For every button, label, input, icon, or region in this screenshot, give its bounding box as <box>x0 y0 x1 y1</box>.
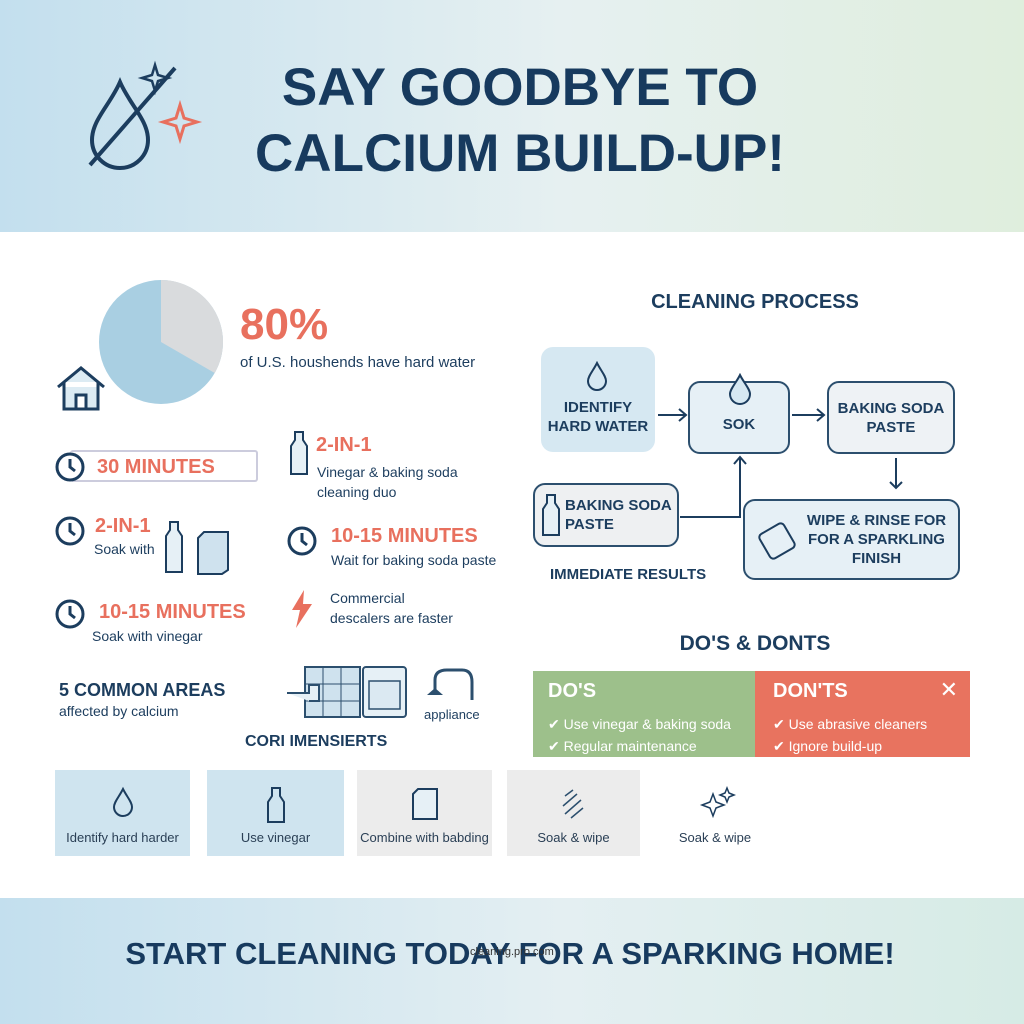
card: vinegar: Use vinegar <box>241 830 310 845</box>
step: identify hard water: IDENTIFY <box>564 398 632 416</box>
header band <box>0 0 1024 232</box>
card: combine <box>357 770 492 856</box>
step: baking soda paste 2: BAKING SODA <box>565 497 672 514</box>
title <box>255 58 785 183</box>
label: immediate results: IMMEDIATE RESULTS <box>550 566 706 583</box>
card: soak & wipe sparkles <box>679 786 751 845</box>
stat: 2-in-1 duo <box>290 431 458 500</box>
stat: 2-in-1 duo: 2-IN-1 <box>316 434 372 456</box>
stat: 10-15 wait: Wait for baking soda paste <box>331 552 496 568</box>
card: identify: Identify hard harder <box>66 830 179 845</box>
title: CALCIUM BUILD-UP! <box>255 124 785 183</box>
stat: 30 minutes <box>56 450 258 482</box>
footer call to action: START CLEANING TODAY FOR A SPARKING HOME! <box>125 936 895 971</box>
flowchart <box>533 347 960 583</box>
heading: cleaning process: CLEANING PROCESS <box>651 291 859 313</box>
icons: faucet tiles, oven, shower <box>287 666 474 718</box>
step: identify hard water <box>541 347 655 452</box>
panel: donts <box>755 671 970 757</box>
step: baking soda paste 2 <box>533 483 679 547</box>
arrows <box>658 408 903 518</box>
panel: donts: ✔ Ignore build-up <box>773 738 882 754</box>
step: sok <box>688 381 790 454</box>
title: SAY GOODBYE TO <box>282 58 758 117</box>
stat 80% <box>240 300 475 371</box>
stat: 10-15 minutes vinegar: 10-15 MINUTES <box>99 601 246 623</box>
panel: donts: DON'TS <box>773 680 848 702</box>
card: soak & wipe <box>507 770 640 856</box>
stat: 30 minutes: 30 MINUTES <box>97 456 215 478</box>
step: baking soda paste <box>827 381 955 454</box>
step: wipe & rinse: FOR A SPARKLING <box>808 531 945 548</box>
stat: 2-in-1 duo: Vinegar & baking soda <box>317 464 458 480</box>
stat: 2-in-1 soak <box>56 515 229 575</box>
stat: 10-15 wait <box>288 525 496 568</box>
stat: 10-15 wait: 10-15 MINUTES <box>331 525 478 547</box>
card: soak & wipe sparkles: Soak & wipe <box>679 830 751 845</box>
5 common areas: 5 COMMON AREAS <box>59 680 225 700</box>
card: identify <box>55 770 190 856</box>
step: wipe & rinse <box>743 499 960 580</box>
icon: house <box>57 366 105 410</box>
panel: donts: ✔ Use abrasive cleaners <box>773 716 927 732</box>
step: wipe & rinse: FINISH <box>852 550 901 567</box>
step: baking soda paste: BAKING SODA <box>838 400 944 416</box>
stat: commercial descalers <box>292 590 453 628</box>
stat: 2-in-1 soak: Soak with <box>94 541 155 557</box>
card: combine: Combine with babding <box>360 830 489 845</box>
pie chart <box>99 280 223 404</box>
stat: 2-in-1 duo: cleaning duo <box>317 484 396 500</box>
panel: do's <box>533 671 755 757</box>
heading: do's & donts: DO'S & DONTS <box>680 632 830 655</box>
stat: commercial descalers: descalers are faster <box>330 610 453 626</box>
icon: crossed water drop with sparkles <box>88 60 202 170</box>
card: vinegar <box>207 770 344 856</box>
text: appliance <box>424 707 480 722</box>
footer band: cleaning.pro.com <box>470 946 554 958</box>
5 common areas: affected by calcium <box>59 703 179 719</box>
panel: do's: DO'S <box>548 680 596 702</box>
card: soak & wipe: Soak & wipe <box>537 830 610 845</box>
stat: commercial descalers: Commercial <box>330 590 405 606</box>
stat 80%: of U.S. houshends have hard water <box>240 354 475 371</box>
stat 80%: 80% <box>240 300 328 349</box>
label: cori mensierts: CORI IMENSIERTS <box>245 733 387 750</box>
panel: donts: ✕ <box>940 677 958 702</box>
step: sok: SOK <box>723 416 755 433</box>
step: baking soda paste: PASTE <box>867 418 915 436</box>
step: wipe & rinse: WIPE & RINSE FOR <box>807 512 946 529</box>
footer band <box>0 898 1024 1024</box>
step: baking soda paste 2: PASTE <box>565 516 614 533</box>
panel: do's: ✔ Use vinegar & baking soda <box>548 716 731 732</box>
stat: 10-15 minutes vinegar: Soak with vinegar <box>92 628 203 644</box>
stat: 10-15 minutes vinegar <box>56 600 246 644</box>
stat: 2-in-1 soak: 2-IN-1 <box>95 515 151 537</box>
panel: do's: ✔ Regular maintenance <box>548 738 697 754</box>
5 common areas <box>59 680 225 719</box>
step: identify hard water: HARD WATER <box>548 418 648 434</box>
